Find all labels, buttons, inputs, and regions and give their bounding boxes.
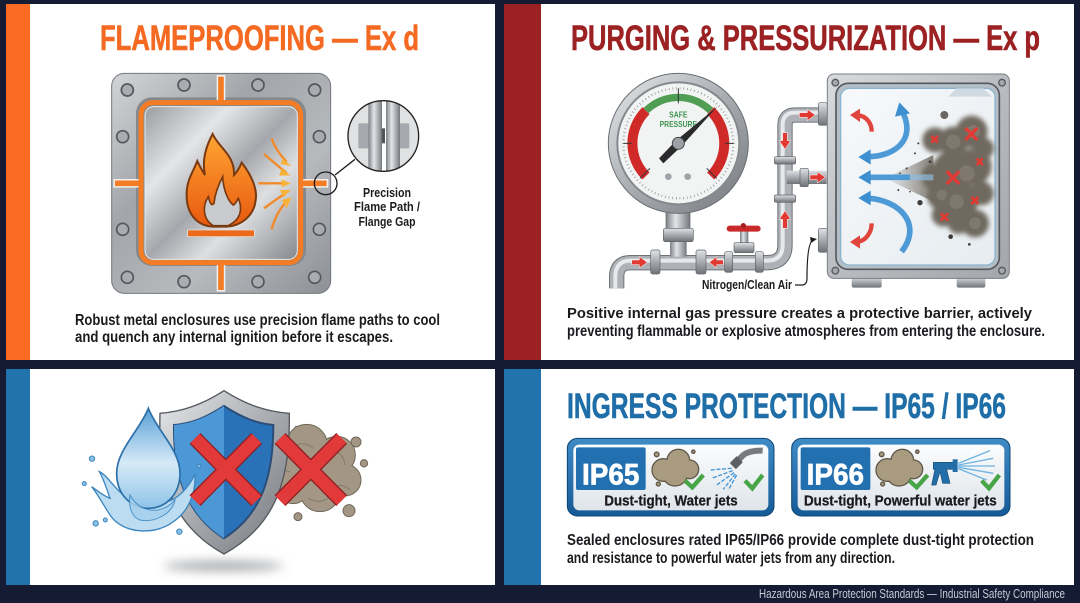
body text: purging [567,305,1045,340]
pressure gauge: PRESSURE [660,119,697,129]
panel: purging and pressurization [504,4,1074,360]
body text: ingress protection: and resistance to powerful water jets from any direction. [567,550,895,567]
panel: flameproofing [6,4,495,360]
body text: flameproofing [75,312,440,346]
flow arrows [632,109,825,268]
label: nitrogen clean air [702,237,817,292]
card: IP65: Dust-tight, Water jets [604,493,738,509]
label: precision flame path [354,185,420,229]
body text: flameproofing: and quench any internal ignition before it escapes. [75,329,393,346]
panel: protection illustration [6,369,495,585]
pipe fittings [651,103,827,274]
smoke cloud with hazards [885,111,994,246]
callout: flange gap detail [314,99,420,195]
icon: dust cloud [264,424,368,521]
card: IP66: Dust-tight, Powerful water jets [804,493,997,509]
label: nitrogen clean air: Nitrogen/Clean Air [702,277,792,292]
illustration: flameproof enclosure [112,73,420,293]
glass enclosure [827,74,1009,288]
body text: flameproofing: Robust metal enclosures use precision flame paths to cool [75,312,440,329]
illustration: pressurized enclosure [608,73,1009,288]
label: precision flame path: Flame Path / [354,199,420,214]
blue purge arrows [858,102,933,252]
label: precision flame path: Precision [363,185,411,200]
icon: red crosses [195,438,342,501]
label: precision flame path: Flange Gap [358,214,416,229]
icon: flame [187,134,256,237]
illustration: shield blocking water and dust [82,391,368,570]
body text: purging: Positive internal gas pressure creates a protective barrier, actively [567,305,1033,322]
card: IP65: IP65 [582,458,639,491]
red outflow arrows [850,109,872,249]
panel: ingress protection [504,369,1074,585]
pressure gauge: SAFE [669,110,688,120]
card: IP66: IP66 [807,458,864,491]
body text: ingress protection [567,532,1034,567]
arrows: cooled flame path [258,138,292,229]
card: IP66 [792,438,1010,516]
pressure gauge [608,73,748,213]
heading: flameproofing: FLAMEPROOFING — Ex d [100,19,419,58]
icon: water drop [82,408,201,534]
bolts [117,79,325,288]
icon: shield [160,391,289,554]
card: IP65 [567,438,774,516]
valve [727,223,761,253]
pipework [615,113,827,288]
